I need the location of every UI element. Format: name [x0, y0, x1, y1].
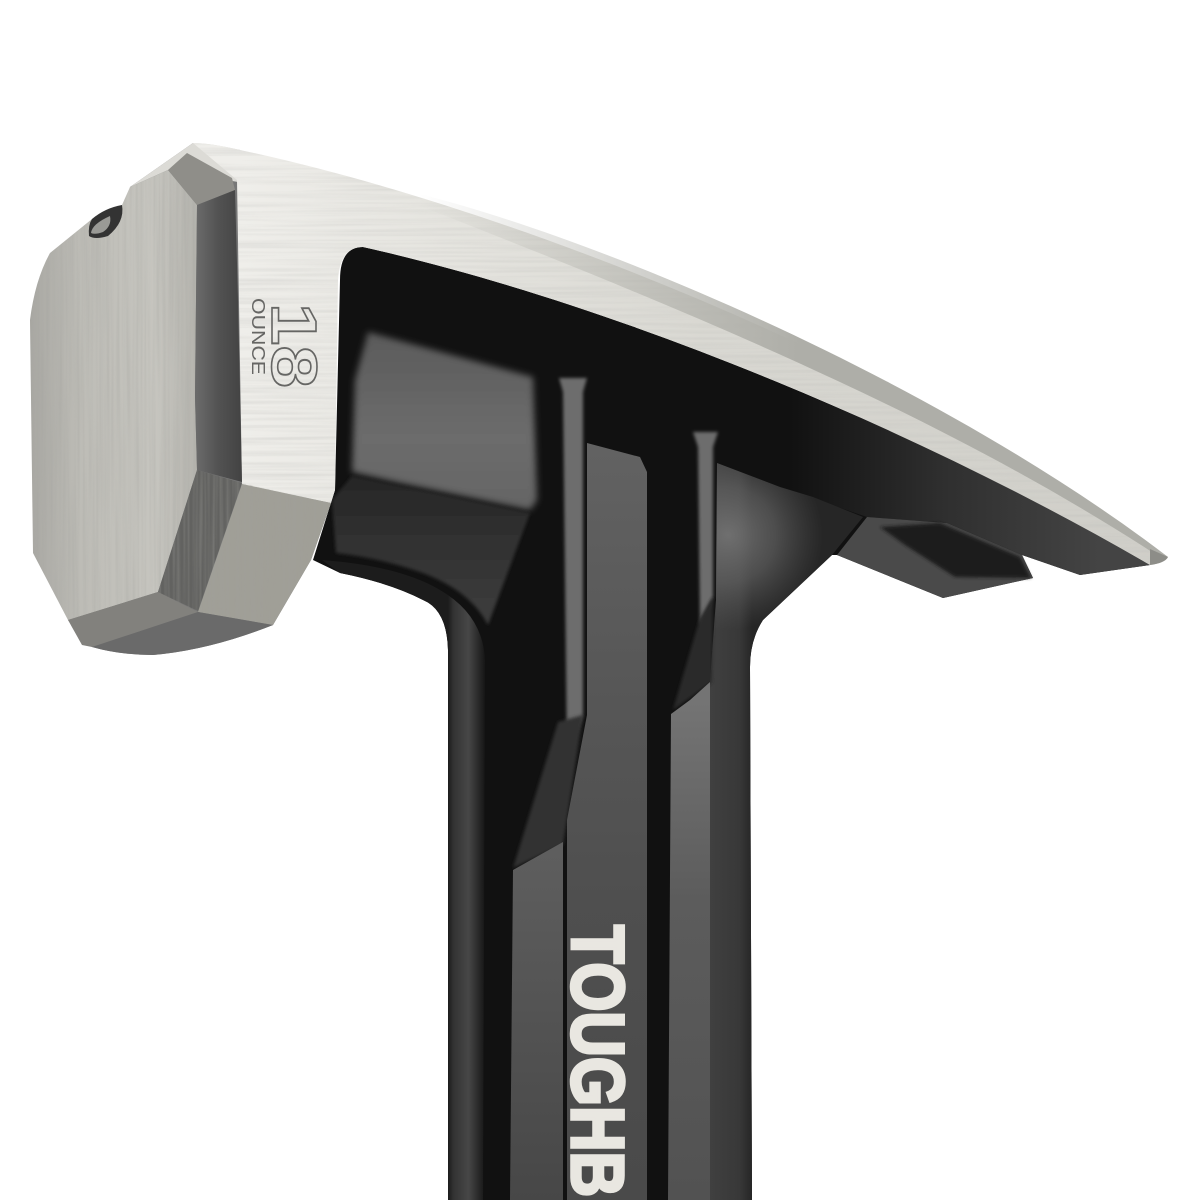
top chamfer: [168, 153, 235, 205]
size number: 18: [258, 303, 330, 388]
right panel base and handle edge: [710, 463, 863, 1200]
left handle band: [322, 560, 485, 1200]
right panel highlight: [716, 463, 811, 614]
lower shadowed panel: [332, 476, 530, 625]
lower left chamfer: [158, 470, 242, 611]
black hammer body and handle: [313, 247, 1150, 1200]
central handle strip: [567, 443, 647, 1200]
rib strip two: [693, 432, 718, 625]
lower left lit panel: [510, 842, 563, 1200]
rib strip one: [559, 378, 587, 760]
right upper panel: [710, 463, 863, 1200]
lower right chamfer: [198, 484, 331, 625]
striking face brushed grain: [30, 170, 197, 620]
hole inner wall: [91, 216, 110, 234]
claw lower lobe: [837, 517, 1033, 598]
ounce label: OUNCE: [248, 298, 268, 375]
base head silhouette: [68, 143, 331, 655]
grey top bevel band: [420, 194, 1168, 557]
right lit panel: [668, 682, 710, 1200]
nail start hole: [89, 205, 122, 238]
diagonal shadow two: [673, 597, 713, 710]
bottom chamfer: [68, 592, 198, 647]
weight marking: [248, 298, 330, 388]
steel side and claw top: [193, 143, 1168, 565]
left grey panel: [352, 332, 537, 510]
claw tip bevel: [1150, 549, 1168, 565]
lower chamfers grain: [158, 470, 331, 625]
steel side brushed grain: [193, 143, 1168, 565]
steel hammer head: [30, 143, 1168, 655]
claw underside: [780, 385, 1150, 575]
hole shadow: [89, 205, 122, 238]
underside: [92, 612, 273, 655]
claw inner shadow: [880, 523, 1031, 578]
body silhouette: [313, 247, 1150, 1200]
diagonal shadow one: [513, 715, 583, 868]
top rim highlight: [130, 143, 240, 187]
striking face: [30, 170, 197, 620]
vertical chamfer: [195, 190, 242, 482]
